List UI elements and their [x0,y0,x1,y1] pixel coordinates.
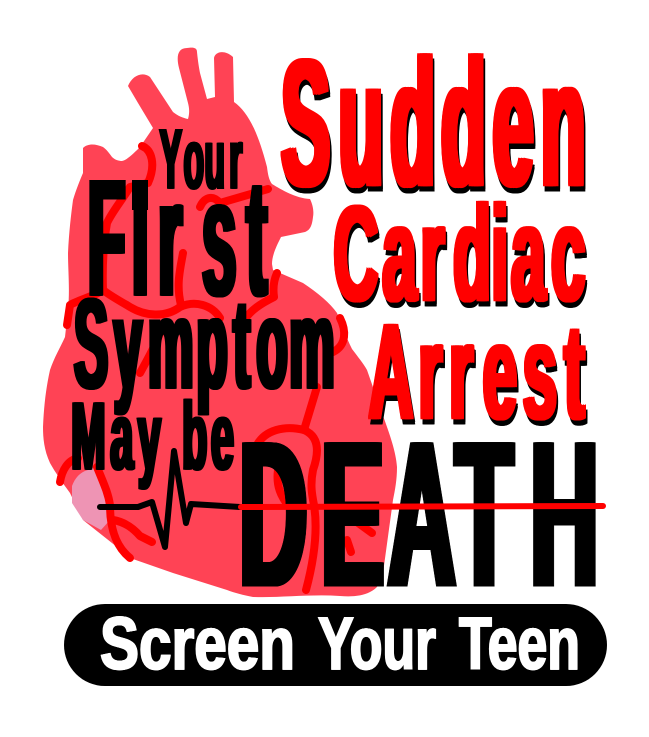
text: Cardiac: Cardiac [333,179,586,330]
infographic canvas [43,48,607,686]
text: First [89,180,269,298]
text: DEATH: DEATH [240,399,598,631]
text: Arrest: Arrest [368,297,585,448]
text: First: First [88,144,267,331]
banner: Screen Your Teen [64,602,607,686]
heart body [43,48,397,597]
coronary vessels [60,146,372,590]
text: Your: Your [318,602,436,685]
text: May be: May be [71,382,234,490]
text: Sudden: Sudden [281,23,586,224]
icon: heartbeat line [100,451,603,547]
heading: Your First Symptom May be [71,112,335,490]
text: Screen: Screen [100,602,295,685]
ecg trace [100,451,240,547]
heading: Sudden Cardiac Arrest [281,23,586,448]
text: Teen: Teen [459,602,580,685]
text: Symptom: Symptom [74,272,335,416]
text: Your: Your [160,112,242,206]
pale patch [72,466,110,530]
icon: anatomical heart [43,48,397,597]
red strike-through [241,506,603,507]
pill [64,604,607,686]
